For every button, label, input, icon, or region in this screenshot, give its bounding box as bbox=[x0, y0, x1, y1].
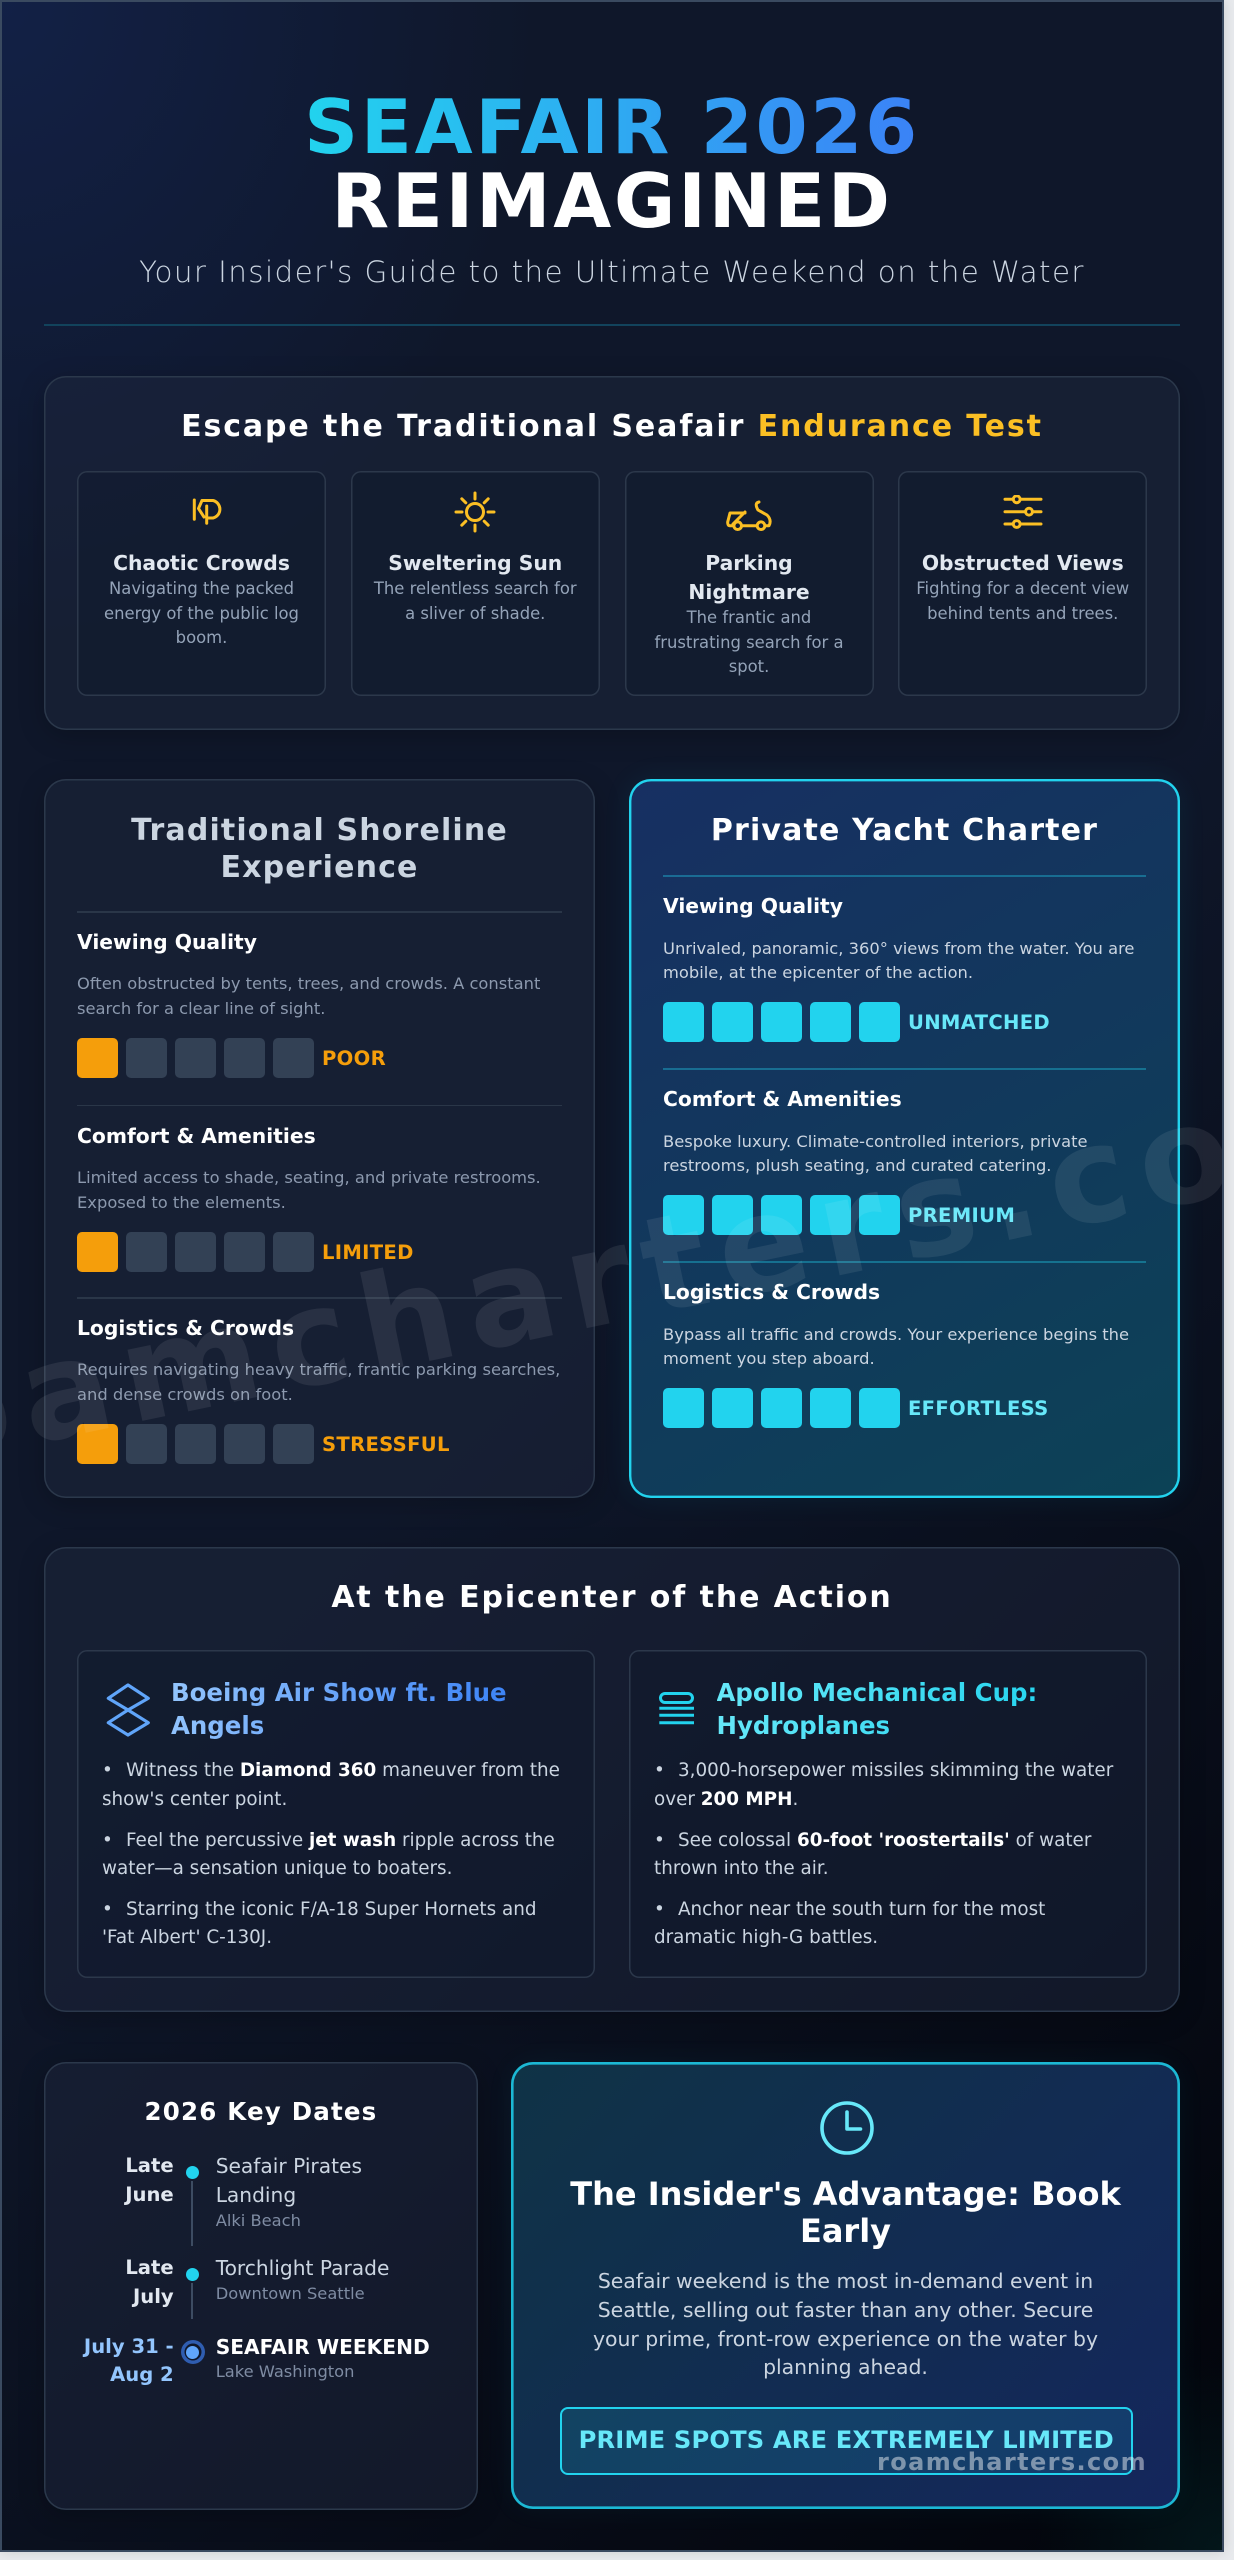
timeline bbox=[82, 2154, 430, 2386]
bullet 1: show's center point. bbox=[102, 1789, 287, 1810]
rating label: STRESSFUL bbox=[322, 1433, 450, 1456]
row heading: Viewing Quality bbox=[77, 930, 257, 954]
icon: car bbox=[726, 500, 772, 531]
card title: Parking bbox=[705, 551, 793, 575]
row heading: Viewing Quality bbox=[663, 894, 843, 918]
panel heading: Private Yacht Charter bbox=[711, 813, 1098, 848]
row text: restrooms, plush seating, and curated catering. bbox=[663, 1156, 1052, 1175]
body text: Seafair weekend is the most in-demand event in bbox=[598, 2269, 1093, 2293]
bullet 2 bbox=[102, 1830, 555, 1879]
heading: book early bbox=[511, 2176, 1180, 2250]
icon: diamond formation bbox=[106, 1683, 150, 1737]
callout: limited spots bbox=[560, 2407, 1132, 2475]
panel: traditional shoreline bbox=[44, 779, 595, 1498]
rating bar: 1 of 5 bbox=[77, 1232, 314, 1272]
rating bar: 5 of 5 bbox=[663, 1195, 900, 1235]
event: seafair weekend bbox=[44, 2333, 444, 2387]
event: seafair weekend: SEAFAIR WEEKEND bbox=[216, 2335, 430, 2359]
date: seafair weekend: July 31 - bbox=[84, 2335, 174, 2358]
card title: Obstructed Views bbox=[922, 551, 1124, 575]
rating bar: 5 of 5 bbox=[663, 1388, 900, 1428]
row heading: Logistics & Crowds bbox=[77, 1316, 294, 1340]
date: late june: June bbox=[125, 2183, 174, 2206]
row: logistics and crowds bbox=[77, 1297, 562, 1464]
date: late june: Late bbox=[125, 2154, 174, 2177]
row text bbox=[77, 1360, 560, 1404]
panel heading: Experience bbox=[220, 850, 419, 885]
heading: book early: Early bbox=[800, 2212, 891, 2250]
row text: Bespoke luxury. Climate-controlled interiors, private bbox=[663, 1132, 1088, 1151]
row text bbox=[77, 974, 540, 1018]
bullet 3: • bbox=[102, 1899, 113, 1920]
bullet 1: • bbox=[654, 1760, 665, 1781]
marker: late june bbox=[186, 2166, 199, 2178]
card heading: Angels bbox=[171, 1710, 264, 1740]
card text: The frantic and bbox=[687, 608, 811, 627]
row text: Limited access to shade, seating, and private restrooms. bbox=[77, 1168, 541, 1187]
panel: insider's advantage bbox=[511, 2062, 1180, 2509]
title: SEAFAIR 2026 bbox=[304, 83, 920, 171]
title bbox=[304, 83, 920, 244]
bullet 3: Anchor near the south turn for the most bbox=[678, 1899, 1045, 1920]
card title: Nightmare bbox=[688, 580, 810, 604]
row text bbox=[663, 939, 1134, 982]
card text: behind tents and trees. bbox=[927, 604, 1118, 622]
card text bbox=[374, 579, 577, 622]
bullet 2: water—a sensation unique to boaters. bbox=[102, 1858, 452, 1879]
body text bbox=[511, 2267, 1180, 2382]
bullet 3 bbox=[102, 1899, 536, 1948]
row text bbox=[77, 1168, 541, 1212]
date: late june bbox=[124, 2154, 174, 2206]
bullet 2: • bbox=[654, 1830, 665, 1851]
heading: key dates: 2026 Key Dates bbox=[144, 2097, 377, 2126]
event: torchlight parade bbox=[44, 2254, 444, 2308]
bullet 3: • bbox=[654, 1899, 665, 1920]
card heading: Hydroplanes bbox=[716, 1710, 890, 1740]
event: torchlight parade: Torchlight Parade bbox=[216, 2256, 389, 2280]
card text: frustrating search for a bbox=[654, 632, 844, 652]
panel heading: Traditional Shoreline bbox=[131, 813, 508, 848]
icon: hydroplane wake bbox=[659, 1692, 694, 1724]
row text bbox=[663, 1324, 1129, 1368]
heading: at the epicenter: At the Epicenter of the Action bbox=[331, 1580, 893, 1615]
bullet 1 bbox=[654, 1760, 1114, 1810]
card text: energy of the public log bbox=[104, 604, 299, 622]
bullet 2 bbox=[654, 1830, 1092, 1879]
card heading bbox=[716, 1676, 1056, 1742]
card text: Fighting for a decent view bbox=[916, 579, 1129, 598]
icon: clock bbox=[817, 2098, 877, 2158]
card: sweltering sun bbox=[351, 471, 600, 696]
bullet 1: • bbox=[102, 1760, 113, 1781]
heading: escape the endurance test: Escape the Traditional Seafair Endurance Test bbox=[181, 409, 1043, 444]
card text bbox=[104, 579, 299, 647]
row text: Bypass all traffic and crowds. Your experience begins the bbox=[663, 1324, 1129, 1344]
row text: search for a clear line of sight. bbox=[77, 999, 325, 1018]
icon: sun bbox=[454, 492, 496, 532]
card text: Navigating the packed bbox=[109, 579, 294, 598]
rating label: PREMIUM bbox=[908, 1204, 1015, 1227]
date: seafair weekend bbox=[44, 2333, 174, 2391]
row text: moment you step aboard. bbox=[663, 1349, 875, 1368]
card: parking nightmare bbox=[624, 471, 874, 696]
card text bbox=[654, 608, 844, 676]
rating bar: 1 of 5 bbox=[77, 1424, 314, 1464]
row heading: Logistics & Crowds bbox=[663, 1280, 880, 1304]
event: pirates landing: Landing bbox=[216, 2183, 296, 2207]
bullet 3 bbox=[654, 1899, 1045, 1948]
row heading: Comfort & Amenities bbox=[663, 1087, 902, 1111]
event: pirates landing bbox=[44, 2152, 444, 2234]
callout: limited spots: PRIME SPOTS ARE EXTREMELY LIMITED bbox=[579, 2426, 1114, 2454]
rating label: POOR bbox=[322, 1047, 386, 1070]
rating bar: 5 of 5 bbox=[663, 1002, 900, 1042]
bullet 2: thrown into the air. bbox=[654, 1858, 829, 1879]
row: comfort and amenities bbox=[663, 1068, 1146, 1235]
rating bar: 1 of 5 bbox=[77, 1038, 314, 1078]
row: comfort and amenities bbox=[77, 1105, 562, 1272]
bullet 1 bbox=[102, 1760, 560, 1810]
body text: planning ahead. bbox=[763, 2355, 928, 2379]
row text: Often obstructed by tents, trees, and crowds. A constant bbox=[77, 974, 540, 993]
card title: Chaotic Crowds bbox=[113, 551, 290, 575]
bullet 1: 3,000-horsepower missiles skimming the water bbox=[678, 1760, 1113, 1781]
panel heading bbox=[131, 813, 508, 885]
panel: endurance test bbox=[44, 376, 1180, 730]
bullet 3: dramatic high-G battles. bbox=[654, 1927, 878, 1948]
bullet 3: 'Fat Albert' C-130J. bbox=[102, 1927, 272, 1948]
card: apollo mechanical cup bbox=[628, 1650, 1147, 1978]
rating label: LIMITED bbox=[322, 1241, 414, 1264]
panel: private yacht charter bbox=[629, 779, 1180, 1498]
card text: The relentless search for bbox=[374, 579, 577, 598]
row text bbox=[663, 1132, 1088, 1175]
panel: key dates bbox=[44, 2062, 478, 2510]
card title: Sweltering Sun bbox=[388, 551, 562, 575]
body text: Seattle, selling out faster than any other. Secure bbox=[598, 2298, 1093, 2322]
event: pirates landing: Alki Beach bbox=[216, 2211, 301, 2230]
rating label: UNMATCHED bbox=[908, 1011, 1050, 1034]
row text: mobile, at the epicenter of the action. bbox=[663, 963, 973, 982]
event: pirates landing: Seafair Pirates bbox=[216, 2154, 362, 2178]
card: boeing air show bbox=[77, 1650, 595, 1978]
bullet 1: over 200 MPH. bbox=[654, 1789, 798, 1810]
card text: a sliver of shade. bbox=[405, 604, 545, 622]
row text: and dense crowds on foot. bbox=[77, 1385, 293, 1404]
event: torchlight parade: Downtown Seattle bbox=[216, 2284, 365, 2303]
event: seafair weekend: Lake Washington bbox=[216, 2362, 354, 2381]
card: obstructed views bbox=[898, 471, 1147, 696]
bullet 2: See colossal 60-foot 'roostertails' of water bbox=[678, 1830, 1091, 1851]
panel: epicenter of the action bbox=[44, 1547, 1180, 2012]
date: late july: Late bbox=[125, 2256, 174, 2279]
marker: seafair weekend bbox=[181, 2340, 205, 2364]
bullet 2: • bbox=[102, 1830, 113, 1851]
heading: book early: The Insider's Advantage: Book bbox=[570, 2174, 1121, 2212]
bullet 3: Starring the iconic F/A-18 Super Hornets and bbox=[126, 1899, 536, 1920]
bullet 1: Witness the Diamond 360 maneuver from the bbox=[126, 1760, 560, 1781]
row text: Exposed to the elements. bbox=[77, 1193, 286, 1212]
row: viewing quality bbox=[77, 911, 562, 1078]
date: seafair weekend: Aug 2 bbox=[110, 2363, 174, 2386]
card text: spot. bbox=[729, 657, 769, 676]
date: late july: July bbox=[133, 2285, 174, 2308]
icon: crowds bbox=[192, 498, 222, 525]
body text: your prime, front-row experience on the water by bbox=[593, 2327, 1098, 2351]
row: logistics and crowds bbox=[663, 1261, 1146, 1428]
card: chaotic crowds bbox=[77, 471, 326, 696]
date: late july bbox=[44, 2254, 174, 2312]
row: viewing quality bbox=[663, 875, 1146, 1042]
row heading: Comfort & Amenities bbox=[77, 1124, 316, 1148]
card heading: Apollo Mechanical Cup: bbox=[716, 1678, 1037, 1706]
card heading: Boeing Air Show ft. Blue bbox=[171, 1678, 507, 1706]
card text bbox=[916, 579, 1129, 622]
marker: late july bbox=[186, 2268, 199, 2280]
title: REIMAGINED bbox=[331, 156, 893, 244]
small watermark: roamcharters.com bbox=[877, 2448, 1147, 2476]
card text: boom. bbox=[176, 628, 227, 647]
card title bbox=[688, 551, 810, 604]
icon: sliders bbox=[1004, 495, 1042, 529]
subtitle: Your Insider's Guide to the Ultimate Weekend on the Water bbox=[139, 255, 1085, 289]
bullet 2: Feel the percussive jet wash ripple across the bbox=[126, 1830, 555, 1851]
row text: Unrivaled, panoramic, 360° views from the water. You are bbox=[663, 939, 1134, 958]
rating label: EFFORTLESS bbox=[908, 1397, 1049, 1420]
card heading bbox=[171, 1676, 507, 1742]
row text: Requires navigating heavy traffic, frantic parking searches, bbox=[77, 1360, 560, 1379]
